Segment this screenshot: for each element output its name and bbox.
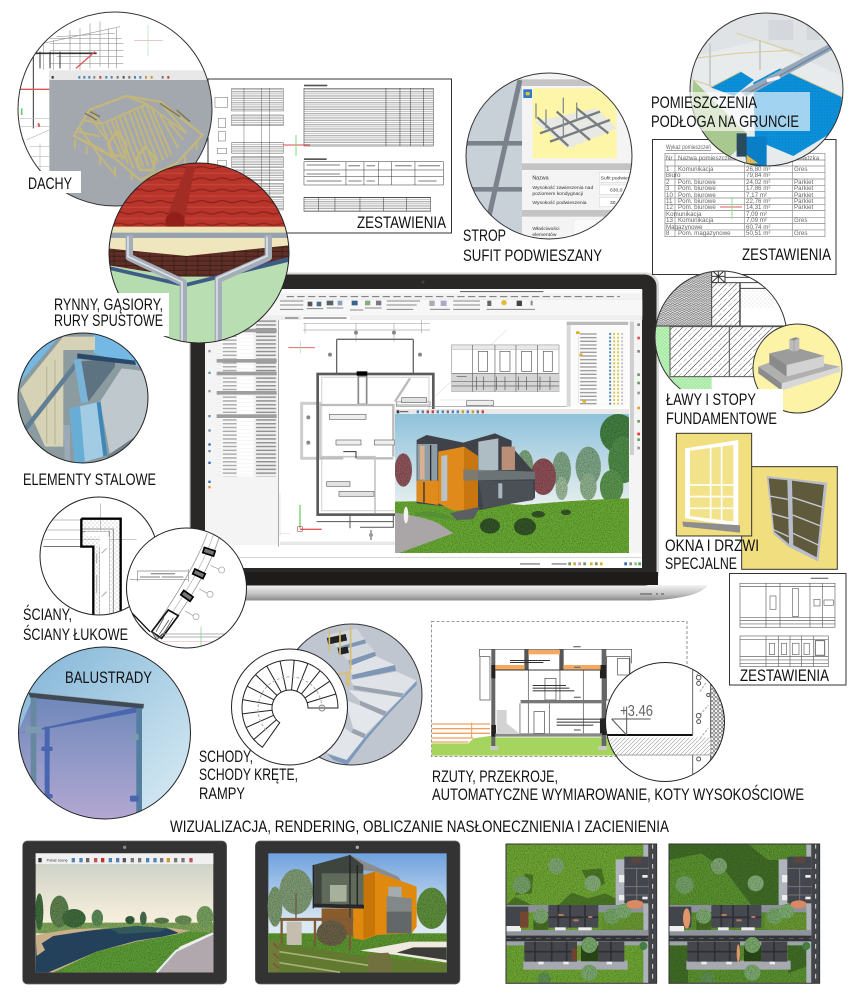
panel: ELEMENTY STALOWE circle (17, 332, 150, 467)
stairs (497, 710, 520, 734)
room table: 12 (666, 204, 673, 211)
frame (506, 844, 657, 983)
laptop bezel (189, 272, 659, 586)
room table: Komunikacja (678, 217, 714, 224)
green walls (111, 270, 180, 287)
room table: Pom. biurowe (678, 204, 716, 211)
clamps (25, 727, 139, 802)
balcony (388, 887, 402, 907)
footing lower (758, 359, 840, 389)
room table: Nr (666, 155, 673, 162)
grey-blue facade (80, 360, 115, 402)
label: rzuty, przekroje (432, 768, 804, 804)
room table: 13 (666, 217, 673, 224)
glass box (313, 855, 363, 905)
label: strop, sufit podwieszany (463, 227, 602, 265)
label: schody, schody krete, rampy: SCHODY, (199, 748, 253, 766)
room table: 7,17 m² (746, 192, 767, 199)
panel: window schedule sheet (730, 574, 846, 685)
toolbar (36, 853, 213, 864)
upper treads (327, 628, 375, 661)
laptop base (142, 585, 708, 600)
layers panel (567, 320, 642, 553)
annotation blocks (510, 660, 603, 726)
label: rzuty, przekroje: RZUTY, PRZEKROJE, (432, 768, 558, 786)
background trees (395, 414, 638, 503)
spiral stair plan (242, 660, 338, 747)
sky (93, 334, 140, 367)
beam (77, 353, 136, 365)
meadow (53, 932, 212, 972)
cream column (20, 337, 95, 447)
green floor (692, 80, 746, 156)
room table: Parkiet (794, 204, 814, 211)
pit (360, 942, 447, 963)
room table: Wykaz pomieszczeń (666, 144, 711, 151)
label: sciany, sciany lukowe: ŚCIANY, (23, 605, 72, 624)
room table: 50,51 m² (746, 230, 770, 237)
room table: Gres (794, 230, 807, 237)
label: strop, sufit podwieszany: STROP (463, 227, 506, 245)
label: pomieszczenia, podloga na gruncie: POMIESZCZENIA (651, 94, 757, 112)
panel: SCIANY circle (40, 497, 158, 617)
grass shadows (506, 868, 616, 905)
panel: laptop with CAD software (142, 272, 708, 600)
house (417, 433, 535, 520)
railing (329, 627, 351, 687)
gutter (107, 233, 293, 238)
room table: Nazwa pomieszczenia (678, 155, 740, 162)
room table: 60,74 m² (746, 224, 770, 231)
grid lines (163, 634, 233, 637)
panel: door illustration (742, 467, 837, 569)
ridge tile (165, 166, 195, 227)
room table: Magazynowe (666, 224, 703, 231)
room table: 79,84 m² (746, 172, 770, 179)
white cover under drawing (712, 388, 782, 392)
walls (491, 649, 495, 746)
wall corner (152, 610, 178, 638)
panel: RYNNY circle (107, 160, 293, 347)
left properties panel (205, 320, 279, 547)
room table: 7,09 m² (746, 211, 767, 218)
reference marks (185, 566, 225, 620)
lower treads (351, 672, 417, 693)
label: dachy: DACHY (28, 175, 72, 193)
orange insulation (495, 650, 601, 670)
label: schody, schody krete, rampy: RAMPY (199, 785, 245, 803)
panel: STROP circle: Właściwości (532, 226, 559, 232)
label: schody, schody krete, rampy: SCHODY KRĘTE, (199, 766, 298, 784)
trees (35, 893, 213, 930)
big column (69, 402, 107, 465)
label: schody, schody krete, rampy (199, 748, 298, 803)
path and bushes (395, 513, 453, 553)
lawn (268, 933, 447, 972)
room table: 2 (666, 179, 670, 186)
slabs (521, 700, 603, 703)
status bar (205, 557, 642, 565)
3d view (49, 71, 213, 207)
floor line (603, 732, 693, 738)
label: pomieszczenia, podloga na gruncie (650, 92, 810, 131)
room table: 22,76 m² (746, 198, 770, 205)
stringer (327, 681, 417, 765)
bricks (107, 245, 293, 277)
room table: Posadzka (792, 155, 820, 162)
aerial view: shadows (669, 844, 820, 986)
room table: Pom. biurowe (678, 179, 716, 186)
fence (278, 943, 368, 972)
lawn (395, 498, 629, 554)
room table: 11 (666, 198, 673, 205)
room table: 24,02 m² (746, 179, 770, 186)
room table: Parkiet (794, 198, 814, 205)
dimension note (130, 569, 188, 582)
room table: 3 (666, 185, 670, 192)
room table: 10 (666, 192, 673, 199)
orange roofs (626, 900, 644, 909)
orange walls (353, 872, 417, 940)
room table: 8 (666, 230, 670, 237)
room table: Parkiet (794, 185, 814, 192)
frame (669, 844, 820, 983)
panel: sciany lukowe circle (126, 528, 246, 648)
label: balustrady: BALUSTRADY (65, 669, 152, 687)
label: pomieszczenia, podloga na gruncie: PODŁOGA NA GRUNCIE (651, 113, 799, 131)
room table: 7,09 m² (746, 217, 767, 224)
label: lawy i stopy fundamentowe: ŁAWY I STOPY (666, 391, 756, 409)
panel: room schedule sheet (652, 140, 836, 274)
panel: STROP circle (463, 70, 641, 243)
crosshair (720, 197, 742, 219)
building lines (479, 649, 632, 733)
pole (77, 359, 85, 403)
schedule tables, left column (215, 88, 283, 210)
fence (432, 723, 490, 742)
label: rynny, gasiory, rury spustowe: RURY SPUSTOWE (54, 312, 163, 330)
footing upper (769, 347, 825, 365)
label: okna i drzwi specjalne: OKNA I DRZWI (665, 537, 759, 555)
label: lawy i stopy fundamentowe (664, 389, 783, 428)
arc wall (152, 533, 220, 633)
beam (740, 43, 835, 97)
room table: 26,80 m² (746, 166, 770, 173)
window openings (181, 547, 215, 601)
panel: STROP circle: poziomem kondygnacji (532, 191, 583, 197)
panel: SCHODY 3d circle (280, 622, 427, 768)
panel: STROP circle: 630,0 (610, 188, 623, 194)
label: elementy stalowe: ELEMENTY STALOWE (23, 471, 156, 489)
room table: 17,86 m² (746, 185, 770, 192)
crosshair (283, 135, 310, 156)
panel: building section (432, 622, 687, 756)
fascia (112, 226, 286, 233)
room table: Biuro (666, 172, 681, 179)
panel: POMIESZCZENIA circle (687, 10, 847, 170)
hatched slab (603, 738, 711, 755)
pergola (280, 915, 353, 924)
panel: STROP circle: Wysokość zawieszenia nad (532, 185, 593, 191)
tablet: house render (255, 841, 460, 984)
panel: STROP circle: Nazwa (532, 175, 549, 181)
room table: Parkiet (794, 179, 814, 186)
label: okna i drzwi specjalne (665, 537, 759, 573)
panel: BALUSTRADY circle (17, 645, 193, 820)
downpipes (129, 235, 268, 347)
panel: SCHODY krete circle (232, 649, 348, 765)
label: sciany, sciany lukowe: ŚCIANY ŁUKOWE (23, 625, 128, 644)
grass shadows (669, 844, 806, 983)
footings (490, 746, 498, 750)
room table (665, 144, 825, 237)
suspended ceiling illustration (534, 108, 617, 148)
roof truss (74, 96, 203, 180)
room table: 14,31 m² (746, 204, 770, 211)
floor plan drawing (280, 320, 567, 545)
roof (350, 855, 402, 882)
schedule tables, right column (304, 85, 443, 211)
ground (432, 736, 623, 756)
label: lawy i stopy fundamentowe: FUNDAMENTOWE (666, 410, 777, 428)
panel: STROP circle: Sufit podwieszany (601, 175, 641, 181)
tablet: lake render (23, 841, 227, 984)
blue floors (711, 72, 754, 96)
label: okna i drzwi specjalne: SPECJALNE (665, 555, 737, 573)
posts (31, 698, 36, 818)
label: zestawienia: ZESTAWIENIA (740, 667, 829, 685)
tablet: lake render: Pokaż scenę (47, 858, 68, 862)
render window (395, 409, 638, 554)
label: sciany, sciany lukowe (23, 605, 128, 644)
label: zestawienia: ZESTAWIENIA (742, 246, 831, 264)
orange roofs (791, 900, 807, 908)
label: zestawienia: ZESTAWIENIA (357, 214, 446, 232)
roof tiles (114, 164, 284, 227)
panel: stopa fundamentowa circle (753, 324, 842, 413)
roof plan lines (20, 22, 123, 173)
far bank (36, 923, 213, 933)
heading: visualisation: WIZUALIZACJA, RENDERING, OBLICZANIE NASŁONECZNIENIA I ZACIENIENIA (170, 818, 669, 836)
label: rynny, gasiory, rury spustowe: RYNNY, GĄSIORY, (54, 296, 163, 314)
panel: FUNDAMENTY circle (654, 270, 786, 389)
treads dark openings (327, 634, 349, 655)
trees (268, 869, 447, 929)
lake (36, 926, 181, 972)
room table: Pom. biurowe (678, 185, 716, 192)
panel: STROP circle: 30 (610, 200, 616, 206)
room table: Komunikacja (678, 166, 714, 173)
panel: elevation mark circle: +3.46 (620, 703, 653, 720)
wall (100, 368, 150, 455)
yellow outlines (693, 33, 842, 97)
panel: roof schedule sheet (208, 79, 452, 233)
label: rynny, gasiory, rury spustowe (48, 293, 169, 336)
room table: 1 (666, 166, 670, 173)
brace (23, 360, 79, 432)
handrail (28, 692, 144, 709)
room table: Pom. biurowe (678, 198, 716, 205)
aerial view: sunlight (506, 844, 657, 986)
column (789, 338, 799, 352)
panel: window illustration (676, 433, 752, 536)
room table: Gres (794, 217, 807, 224)
ribbon (205, 289, 642, 320)
panel: DACHY circle (17, 10, 217, 210)
room table: Parkiet (794, 192, 814, 199)
panel: elevation mark circle (603, 662, 725, 782)
insulation layer (693, 662, 711, 782)
panel: STROP circle: Wysokość podwieszenia (532, 200, 587, 206)
mesh layer (711, 662, 725, 782)
screen (205, 289, 642, 568)
panel: STROP circle: elementów (532, 232, 557, 238)
road (157, 934, 213, 972)
shore (36, 927, 110, 956)
elevation mark (612, 707, 651, 735)
window schedule on screen (452, 345, 559, 392)
glass (17, 697, 142, 820)
label: strop, sufit podwieszany: SUFIT PODWIESZANY (463, 247, 602, 265)
room table: Pom. biurowe (678, 192, 716, 199)
room table: Pom. magazynowe (678, 230, 731, 237)
room table: Gres (794, 166, 807, 173)
room table: Komunikacja (666, 211, 702, 218)
